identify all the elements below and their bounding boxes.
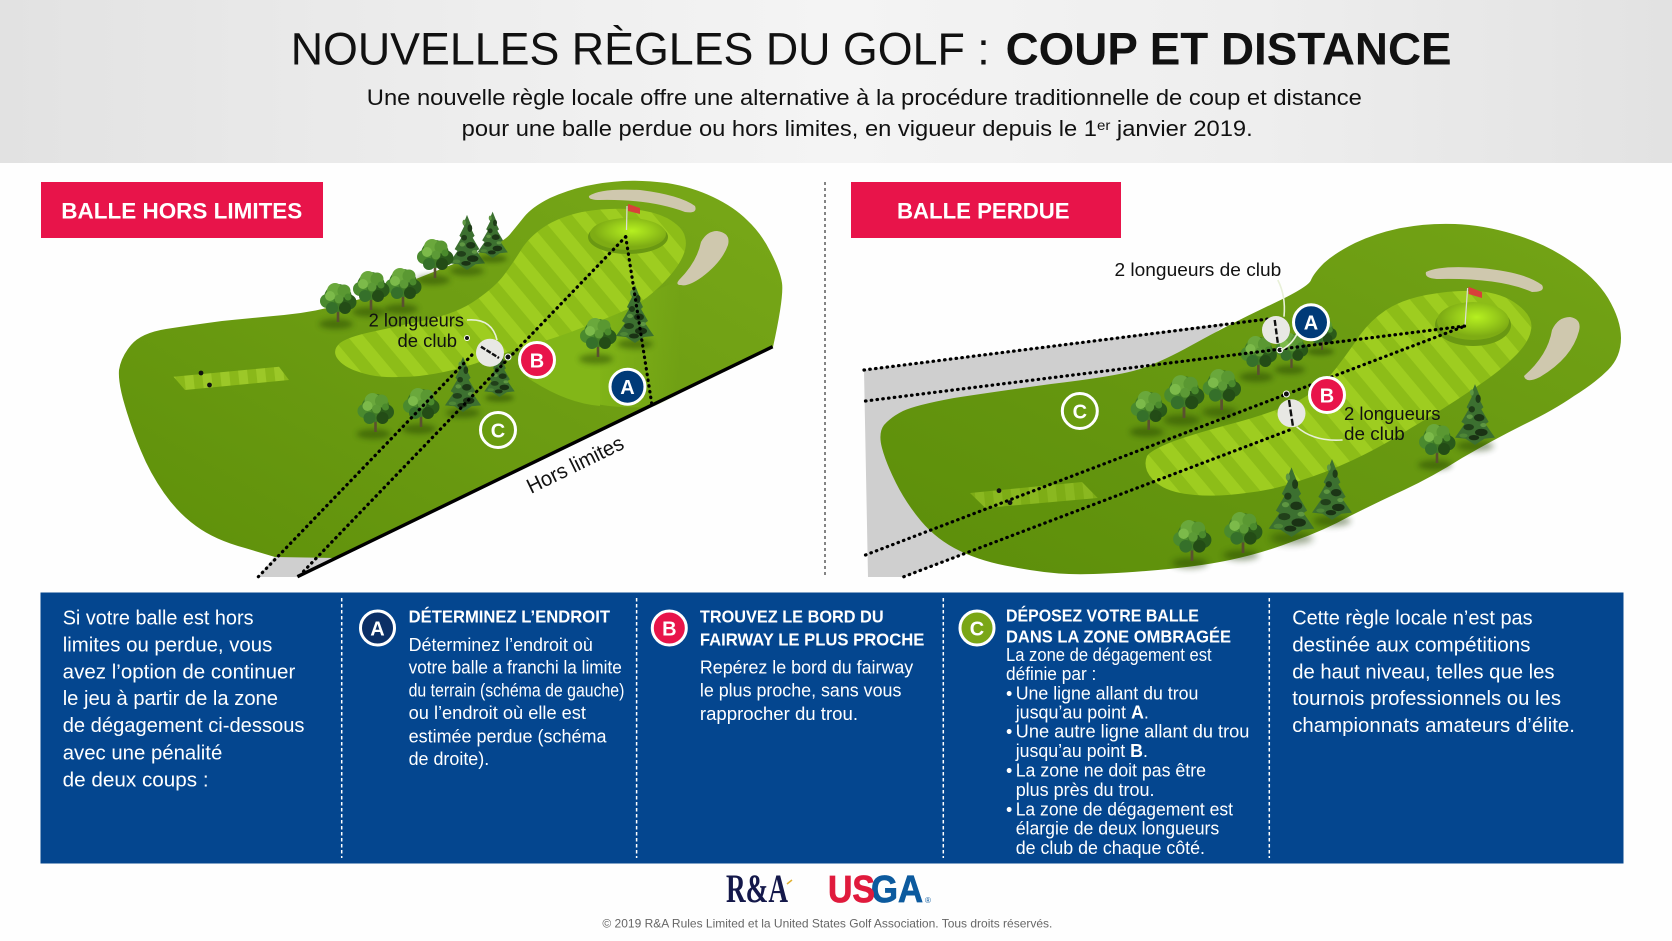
badge A: A [620, 377, 635, 399]
heading: balle perdue [851, 182, 1121, 238]
title [291, 24, 1452, 74]
logo: USGA: US [828, 869, 875, 911]
subtitle: janvier 2019. [1110, 116, 1253, 141]
course left [119, 181, 782, 558]
subtitle: Une nouvelle règle locale offre une alternative à la procédure traditionnelle de coup et distance [367, 85, 1362, 110]
badge C: C [1073, 401, 1087, 423]
badge C [480, 412, 516, 448]
badge B: B [662, 618, 677, 640]
logo: USGA: GA [871, 869, 923, 911]
relief zone lighter patch [528, 280, 690, 407]
text: local rule note: destinée aux compétitions [1292, 633, 1530, 656]
dotted relief lines [864, 318, 1465, 577]
heading: balle hors limites [41, 182, 323, 238]
central dotted separator [824, 182, 826, 575]
text C: Une ligne allant du trou [1016, 683, 1198, 703]
text B: rapprocher du trou. [700, 704, 858, 724]
green and flag [588, 220, 668, 254]
bunkers [1426, 267, 1543, 292]
badge A: A [370, 618, 385, 640]
panel: explanation [40, 592, 1624, 864]
diagram: balle hors limites [119, 181, 782, 577]
heading C [1006, 605, 1231, 646]
badge B [652, 611, 686, 645]
bunkers [589, 190, 696, 212]
callout: 2 longueurs de club lower: 2 longueurs [1344, 404, 1440, 424]
text C: plus près du trou. [1016, 780, 1154, 800]
text C: jusqu’au point A. [1015, 702, 1149, 722]
out of bounds line [297, 347, 773, 577]
text: introduction: de deux coups : [63, 768, 209, 791]
text C: La zone ne doit pas être [1016, 761, 1206, 781]
fairway left [335, 209, 686, 377]
text B: le plus proche, sans vous [700, 681, 901, 701]
text: introduction: avez l’option de continuer [63, 660, 295, 683]
heading C: DÉPOSEZ VOTRE BALLE [1006, 605, 1199, 626]
title: NOUVELLES RÈGLES DU GOLF : [291, 24, 990, 74]
badge B: B [530, 350, 544, 372]
callout: 2 longueurs de club lower: de club [1344, 424, 1405, 444]
text: introduction: le jeu à partir de la zone [63, 687, 278, 710]
text: local rule note: championnats amateurs d’élite. [1292, 714, 1575, 737]
trees [449, 215, 485, 276]
fairway right [1146, 291, 1531, 496]
text B [700, 657, 913, 724]
column B [652, 606, 924, 724]
callout: 2 longueurs de club top [1114, 260, 1284, 317]
badge B [1310, 378, 1344, 412]
text B: Repérez le bord du fairway [700, 657, 913, 677]
text C: de club de chaque côté. [1016, 838, 1205, 858]
callout: 2 longueurs de club top: 2 longueurs de club [1114, 260, 1281, 280]
text: introduction [63, 606, 305, 791]
text C: • [1006, 683, 1012, 703]
text A: estimée perdue (schéma [409, 726, 607, 746]
callout: 2 longueurs de club [369, 311, 497, 351]
badge C [960, 611, 994, 645]
label: hors limites: Hors limites [523, 432, 628, 498]
text: introduction: de dégagement ci-dessous [63, 714, 305, 737]
column A [360, 605, 624, 769]
text C: élargie de deux longueurs [1016, 819, 1219, 839]
dotted relief lines [258, 237, 652, 577]
heading: balle perdue: BALLE PERDUE [897, 198, 1070, 223]
logo: R&A: R&A [726, 866, 788, 911]
text A [409, 635, 624, 769]
text A: du terrain (schéma de gauche) [409, 681, 624, 701]
copyright: © 2019 R&A Rules Limited et la United States Golf Association. Tous droits réservés. [602, 917, 1052, 931]
logo: USGA: ® [925, 896, 931, 905]
green and flag [1435, 304, 1511, 346]
club length marker [464, 336, 511, 367]
heading C: DANS LA ZONE OMBRAGÉE [1006, 625, 1231, 646]
badge C: C [491, 420, 505, 442]
heading B: FAIRWAY LE PLUS PROCHE [700, 630, 924, 650]
title: COUP ET DISTANCE [1006, 24, 1452, 74]
text C: jusqu’au point B. [1015, 741, 1148, 761]
text: introduction: Si votre balle est hors [63, 606, 254, 629]
text C: La zone de dégagement est [1016, 799, 1233, 819]
badge B: B [1320, 385, 1334, 407]
text: introduction: avec une pénalité [63, 741, 222, 764]
text: local rule note: tournois professionnels ou les [1292, 687, 1561, 710]
text: local rule note: de haut niveau, telles que les [1292, 660, 1554, 683]
badge C: C [970, 618, 984, 640]
text A: votre balle a franchi la limite [409, 657, 622, 677]
text C: • [1006, 722, 1012, 742]
logo: USGA [828, 869, 931, 911]
tee markers [997, 488, 1012, 505]
tee box [970, 482, 1098, 508]
column C [960, 605, 1249, 858]
text: introduction: limites ou perdue, vous [63, 633, 272, 656]
heading B: TROUVEZ LE BORD DU [700, 606, 884, 626]
heading B [700, 606, 924, 650]
club length marker B [1278, 391, 1306, 427]
text: local rule note: Cette règle locale n’est pas [1292, 606, 1533, 629]
text: local rule note [1292, 606, 1575, 737]
badge C [1062, 394, 1097, 428]
text C: • [1006, 761, 1012, 781]
callout: 2 longueurs de club: 2 longueurs [369, 311, 464, 331]
subtitle: er [1097, 117, 1111, 133]
callout: 2 longueurs de club: de club [398, 331, 457, 351]
text C [1006, 645, 1249, 858]
badge A [610, 369, 645, 404]
badge A [360, 611, 394, 645]
diagram: balle perdue [864, 224, 1621, 577]
course right [880, 224, 1621, 574]
header band [0, 0, 1672, 163]
gray relief zone outside course [864, 323, 1228, 577]
text A: Déterminez l’endroit où [409, 635, 593, 655]
text A: de droite). [409, 749, 489, 769]
trees [1130, 391, 1167, 437]
text A: ou l’endroit où elle est [409, 703, 586, 723]
text C: définie par : [1006, 664, 1096, 684]
club length marker A [1262, 316, 1298, 353]
text C: • [1006, 799, 1012, 819]
text C: La zone de dégagement est [1006, 645, 1212, 665]
subtitle [367, 85, 1362, 141]
tee box [174, 367, 289, 390]
heading A: DÉTERMINEZ L’ENDROIT [409, 605, 610, 626]
text C: Une autre ligne allant du trou [1016, 722, 1249, 742]
callout: 2 longueurs de club lower [1297, 404, 1440, 444]
badge B [520, 342, 554, 378]
out of bounds gray zone [258, 556, 336, 577]
badge A [1294, 305, 1328, 340]
badge A: A [1304, 312, 1318, 334]
subtitle: pour une balle perdue ou hors limites, en vigueur depuis le 1 [462, 116, 1051, 141]
heading: balle hors limites: BALLE HORS LIMITES [61, 198, 302, 223]
